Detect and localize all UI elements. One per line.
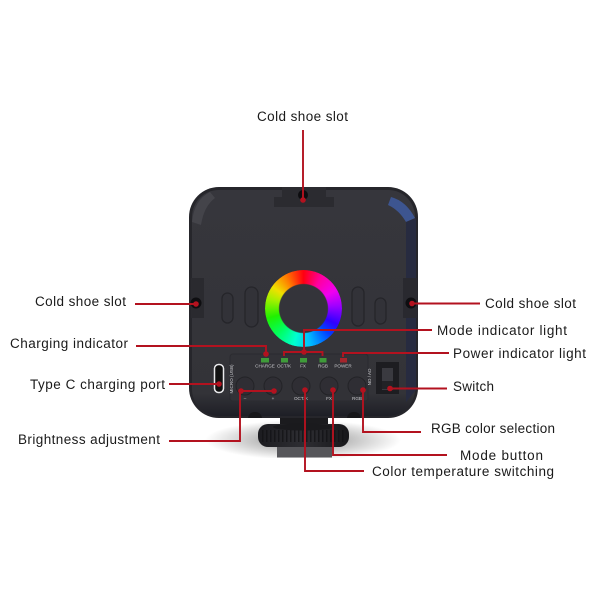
- label: RGB color selection: RGB color selection: [431, 421, 555, 436]
- callout line: type C: [169, 381, 222, 387]
- indicator labels: RGB: [318, 364, 328, 368]
- label: mode indicator light: Mode indicator light: [437, 323, 567, 338]
- indicator labels: OCT/K: [277, 364, 292, 368]
- bottom notches: [248, 412, 361, 418]
- label: top cold shoe slot: Cold shoe slot: [257, 109, 348, 124]
- left cold shoe slot: [190, 278, 204, 318]
- USB-C port: MICRO (USB): [229, 364, 234, 394]
- indicator labels: [255, 364, 352, 368]
- top cold shoe slot: [274, 187, 334, 207]
- label: color temperature switching: Color temperature switching: [372, 464, 554, 479]
- button labels: OCT/K: [294, 396, 309, 401]
- label: mode button: Mode button: [460, 448, 543, 463]
- ground shadow: [205, 418, 401, 458]
- USB-C port: [214, 364, 234, 394]
- buttons: [236, 377, 366, 395]
- label: charging indicator: Charging indicator: [10, 336, 128, 351]
- top-left corner bevel: [192, 192, 215, 225]
- button labels: RGB: [352, 396, 362, 401]
- button labels: [244, 368, 372, 401]
- callout line: brightness: [169, 388, 277, 441]
- light body: [189, 187, 418, 418]
- callout line: top cold shoe: [300, 130, 306, 203]
- callout line: switch: [387, 386, 447, 391]
- label: switch: Switch: [453, 379, 494, 394]
- switch: [376, 362, 399, 394]
- button labels: +: [272, 396, 275, 401]
- callout line: right cold shoe: [409, 301, 480, 306]
- indicator labels: FX: [300, 364, 306, 368]
- indicator lights: [261, 358, 347, 362]
- mount: cold shoe base and knob: [258, 416, 349, 458]
- callout line: RGB selection: [360, 387, 421, 432]
- RGB color ring: [265, 270, 342, 346]
- button labels: NO / AD: [367, 368, 372, 385]
- indicator labels: POWER: [334, 364, 352, 368]
- button labels: FX: [326, 396, 332, 401]
- right cold shoe slot: [403, 278, 417, 318]
- button labels: –: [244, 396, 247, 401]
- callout line: color temperature: [302, 387, 364, 471]
- label: brightness adjustment: Brightness adjustment: [18, 432, 160, 447]
- label: power indicator light: Power indicator light: [453, 346, 586, 361]
- callout line: left cold shoe: [135, 301, 199, 307]
- control panel outline: [230, 354, 368, 401]
- label: type C charging port: Type C charging port: [30, 377, 165, 392]
- callout line: mode indicator: [284, 330, 432, 356]
- callout line: power indicator: [343, 353, 449, 357]
- callout line: charging indicator: [136, 346, 269, 357]
- label: left cold shoe slot: Cold shoe slot: [35, 294, 126, 309]
- blue corner highlight: [388, 197, 415, 222]
- indicator labels: CHARGE: [255, 364, 275, 368]
- label: right cold shoe slot: Cold shoe slot: [485, 296, 576, 311]
- vent slots: [222, 287, 386, 327]
- callout line: mode button: [330, 387, 447, 455]
